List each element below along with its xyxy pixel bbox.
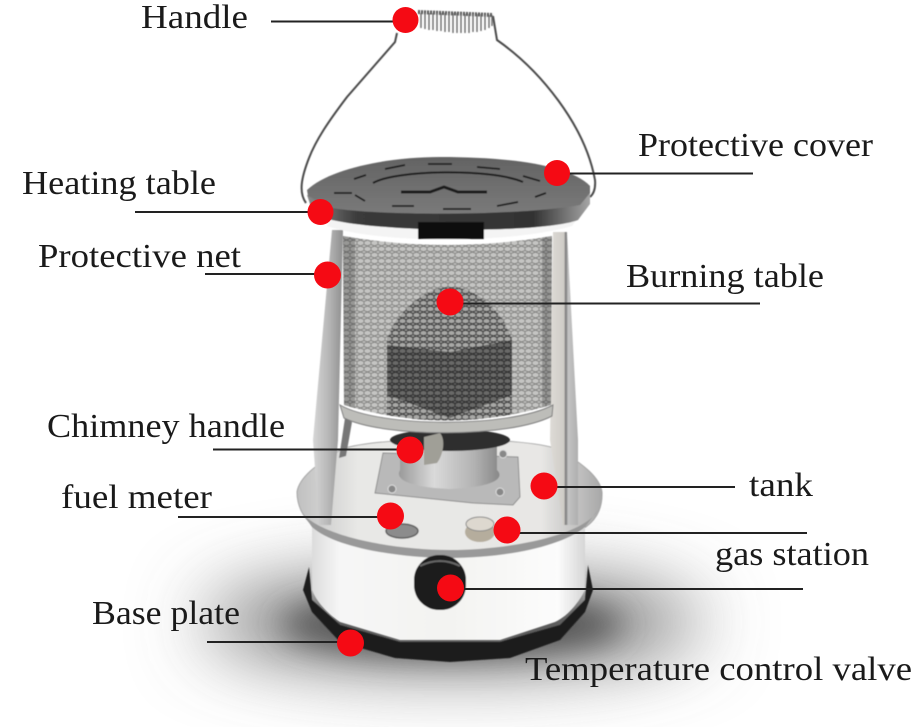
- label: tank: tank: [749, 467, 813, 504]
- base plate: [303, 565, 593, 662]
- label: Base plate: Base plate: [92, 595, 240, 632]
- bolts: [388, 450, 507, 496]
- label: Protective net: Protective net: [38, 238, 242, 275]
- label: Protective cover: Protective cover: [638, 127, 874, 164]
- temperature knob: [414, 555, 466, 610]
- protective net: [343, 236, 552, 420]
- tank body: [312, 523, 585, 640]
- chimney seat: [390, 429, 510, 451]
- label: Chimney handle: Chimney handle: [47, 408, 285, 445]
- label: Heating table: Heating table: [22, 165, 216, 202]
- protective cover lid: [307, 157, 590, 240]
- label: fuel meter: fuel meter: [61, 479, 213, 516]
- inner leg: [339, 418, 352, 458]
- burning core: [343, 236, 552, 425]
- floor shadow: [202, 578, 702, 666]
- tripod legs: [313, 230, 578, 525]
- leader lines: [135, 22, 807, 642]
- label: Handle: Handle: [141, 0, 248, 36]
- burner mounting plate: [375, 453, 520, 505]
- wire handle: [302, 16, 595, 203]
- net lower ring: [340, 405, 553, 433]
- tank flange: [297, 439, 602, 551]
- fuel meter gauge: [386, 524, 418, 538]
- label: gas station: gas station: [715, 536, 869, 573]
- handle spring: [418, 12, 493, 33]
- callout dots: [308, 7, 570, 656]
- gas cap: [465, 517, 495, 542]
- label: Burning table: Burning table: [626, 258, 824, 295]
- chimney lever: [424, 433, 443, 465]
- tank rim: [300, 510, 598, 558]
- burner column: [399, 438, 500, 489]
- heater illustration: [297, 12, 602, 662]
- label: Temperature control valve: Temperature control valve: [525, 651, 912, 688]
